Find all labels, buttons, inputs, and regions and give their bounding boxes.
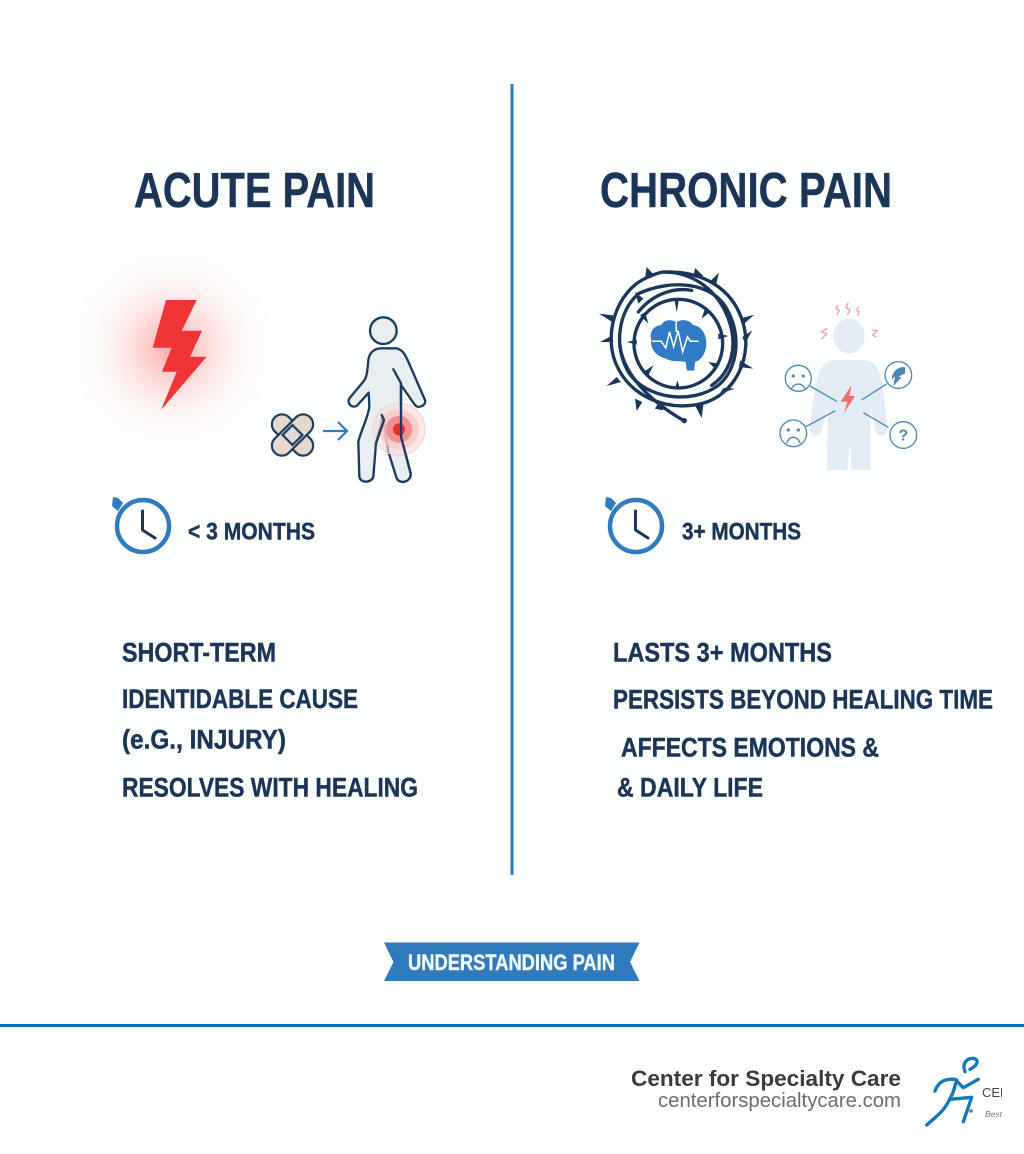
heading: acute pain: ACUTE PAIN (134, 164, 375, 218)
icon: body with pain connections (780, 302, 917, 470)
icon: thorn rings around brain (599, 267, 754, 423)
list: acute characteristics: IDENTIDABLE CAUSE (122, 684, 358, 714)
icon: brain with pulse (651, 320, 706, 370)
panel: acute pain (67, 164, 425, 802)
heading: chronic pain: CHRONIC PAIN (600, 164, 892, 218)
body silhouette (810, 319, 887, 470)
footer band (0, 1027, 1024, 1154)
icon: body with pain connections: ? (898, 427, 908, 444)
footer brand text: centerforspecialtycare.com (658, 1089, 901, 1112)
logo: runner: Best (985, 1109, 1003, 1119)
logo: runner: CEN (982, 1085, 1009, 1100)
squiggles above head (821, 302, 877, 339)
icon: stopwatch (605, 497, 662, 552)
red bolt (841, 385, 855, 413)
duration label: < 3 MONTHS (188, 518, 315, 546)
face and symbol badges (780, 362, 917, 448)
arrow: bandage to body (323, 422, 347, 440)
icon: person with pain spot on hip (349, 317, 425, 482)
icon: lightning bolt with red glow (67, 243, 277, 453)
arrows to bolt (806, 384, 888, 427)
icon: stopwatch (112, 497, 169, 552)
duration label: 3+ MONTHS (682, 518, 801, 546)
list: chronic characteristics: & DAILY LIFE (617, 772, 763, 802)
footer brand text: Center for Specialty Care (631, 1066, 901, 1091)
icon: bandage (257, 400, 328, 470)
ribbon: understanding pain (384, 942, 640, 981)
list: acute characteristics (122, 638, 418, 802)
list: chronic characteristics: AFFECTS EMOTIONS & (621, 732, 879, 762)
ribbon: understanding pain: UNDERSTANDING PAIN (408, 950, 615, 975)
list: acute characteristics: (e.G., INJURY) (122, 724, 286, 754)
list: chronic characteristics: LASTS 3+ MONTHS (613, 638, 832, 668)
list: acute characteristics: SHORT-TERM (122, 638, 276, 668)
footer brand text (631, 1066, 901, 1112)
list: chronic characteristics (613, 638, 993, 802)
center divider (510, 84, 514, 875)
panel: chronic pain (599, 164, 993, 802)
footer rule (0, 1024, 1024, 1027)
list: acute characteristics: RESOLVES WITH HEALING (122, 772, 418, 802)
logo: runner (927, 1058, 1009, 1125)
